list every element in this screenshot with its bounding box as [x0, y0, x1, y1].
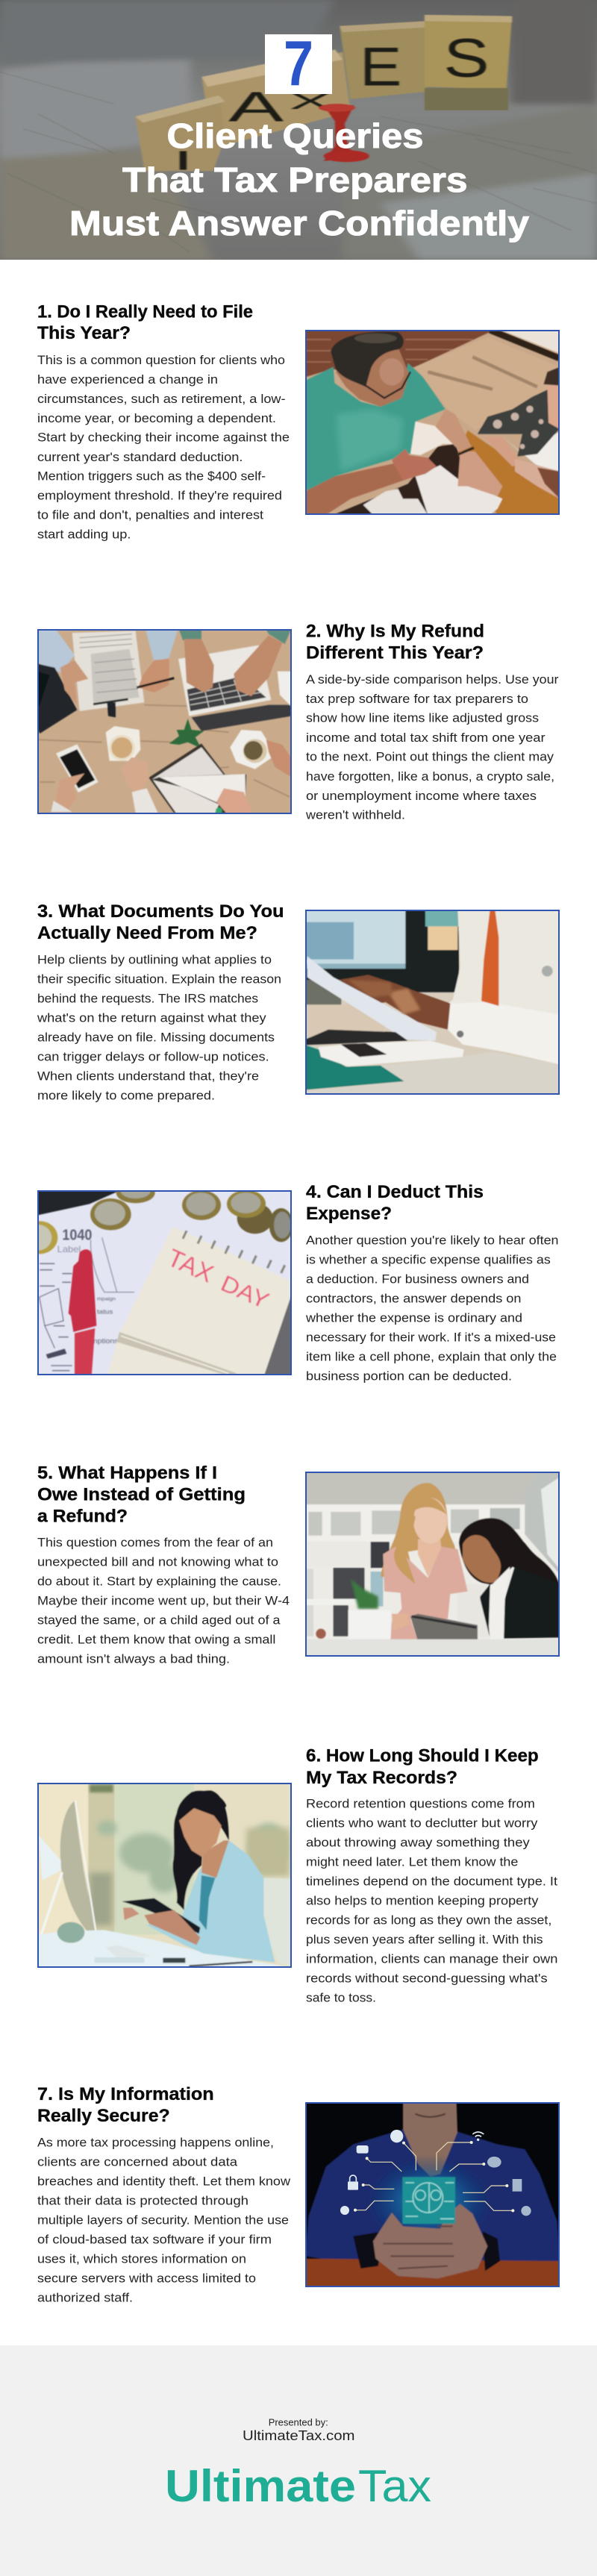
body text 7: secure servers with access limited to [37, 2271, 256, 2285]
body text 6: safe to toss. [306, 1991, 376, 2005]
heading 5: a Refund? [37, 1506, 128, 1526]
body text 3 [37, 953, 281, 1102]
header photo: scrabble tiles on map: E [360, 37, 401, 98]
body text 2: weren't withheld. [305, 808, 405, 822]
body text 4: business portion can be deducted. [306, 1369, 512, 1384]
heading 4: Expense? [306, 1204, 392, 1224]
body text 7 [37, 2136, 291, 2305]
body text 7: that their data is protected through [37, 2194, 249, 2208]
number 7 badge [265, 28, 332, 99]
body text 4: contractors, the answer depends on [306, 1292, 521, 1306]
photo 4: tax day notepad and coins: 1040 [62, 1228, 92, 1244]
body text 1: start adding up. [37, 527, 131, 542]
body text 3: more likely to come prepared. [37, 1088, 215, 1102]
body text 7: As more tax processing happens online, [37, 2136, 274, 2149]
body text 6: information, clients can manage their own [306, 1952, 557, 1966]
body text 5: stayed the same, or a child aged out of a [37, 1613, 281, 1627]
body text 4: whether the expense is ordinary and [305, 1310, 522, 1325]
header banner [0, 0, 597, 260]
title [69, 116, 529, 243]
body text 2: to the next. Point out things the client may [306, 750, 554, 764]
heading 3 [37, 901, 284, 943]
UltimateTax logo [165, 2461, 431, 2511]
panel: question 2 [37, 622, 559, 822]
heading 2 [306, 622, 484, 663]
body text 4: a deduction. For business owners and [306, 1272, 529, 1286]
panel: question 3 [37, 901, 560, 1102]
photo 4: tax day notepad and coins [22, 1182, 293, 1377]
footer [0, 2345, 597, 2576]
heading 6: 6. How Long Should I Keep [306, 1746, 539, 1766]
heading 3: 3. What Documents Do You [37, 901, 284, 922]
photo 2: team at wooden table [37, 629, 292, 814]
presented by credit: Presented by: [269, 2417, 328, 2428]
panel: question 1 [37, 301, 560, 542]
header photo: scrabble tiles on map: X [290, 90, 331, 114]
body text 6: also helps to mention keeping property [306, 1894, 539, 1907]
body text 1: Mention triggers such as the $400 self- [37, 469, 266, 484]
body text 5 [37, 1535, 290, 1666]
heading 4 [306, 1182, 484, 1224]
body text 7: multiple layers of security. Mention the use [37, 2213, 289, 2228]
heading 7: 7. Is My Information [37, 2084, 214, 2104]
panel: question 7 [37, 2084, 560, 2305]
heading 4: 4. Can I Deduct This [306, 1182, 484, 1202]
body text 2: have forgotten, like a bonus, a crypto sale, [306, 769, 554, 784]
body text 4: necessary for their work. If it's a mixed-use [306, 1330, 556, 1344]
heading 7: Really Secure? [37, 2106, 170, 2126]
photo 4: tax day notepad and coins: TAX [163, 1244, 217, 1289]
body text 7: authorized staff. [37, 2291, 133, 2305]
body text 1: current year's standard deduction. [37, 450, 243, 464]
body text 1: This is a common question for clients who [37, 353, 285, 367]
photo 4: tax day notepad and coins: mpaign [97, 1297, 116, 1302]
body text 4: item like a cell phone, explain that only the [306, 1350, 557, 1364]
body text 4: is whether a specific expense qualifies as [306, 1252, 551, 1267]
body text 6: timelines depend on the document type. It [306, 1875, 557, 1888]
header photo: scrabble tiles on map: S [443, 28, 490, 89]
UltimateTax logo: Tax [358, 2461, 431, 2511]
heading 5 [37, 1463, 246, 1526]
photo 6: woman with tablet at desk [37, 1783, 292, 1968]
presented by credit: UltimateTax.com [243, 2428, 355, 2443]
body text 6: records for as long as they own the asset, [306, 1913, 551, 1928]
body text 2: A side-by-side comparison helps. Use your [306, 672, 559, 687]
body text 6: Record retention questions come from [306, 1796, 535, 1810]
body text 4: Another question you're likely to hear often [306, 1234, 558, 1248]
body text 4 [305, 1234, 558, 1384]
UltimateTax logo: Ultimate [165, 2461, 356, 2511]
body text 3: what's on the return against what they [37, 1011, 266, 1025]
body text 7: clients are concerned about data [37, 2154, 238, 2169]
body text 5: unexpected bill and not knowing what to [37, 1555, 278, 1569]
body text 1: Start by checking their income against the [37, 430, 290, 445]
body text 6: about throwing away something they [306, 1836, 530, 1849]
body text 1: to file and don't, penalties and interest [37, 507, 263, 522]
body text 1 [37, 353, 290, 542]
title: That Tax Preparers [122, 160, 467, 199]
heading 6 [306, 1746, 539, 1788]
heading 2: 2. Why Is My Refund [306, 622, 484, 642]
body text 1: circumstances, such as retirement, a low- [37, 392, 285, 406]
body text 5: credit. Let them know that owing a small [37, 1633, 275, 1646]
heading 5: 5. What Happens If I [37, 1463, 217, 1484]
heading 2: Different This Year? [306, 643, 484, 663]
heading 3: Actually Need From Me? [37, 923, 257, 943]
body text 6: clients who want to declutter but worry [306, 1816, 538, 1830]
body text 2: tax prep software for tax preparers to [306, 692, 528, 706]
body text 2: show how line items like adjusted gross [306, 711, 539, 725]
heading 7 [37, 2084, 214, 2126]
photo 4: tax day notepad and coins: DAY [217, 1271, 272, 1314]
body text 6: plus seven years after selling it. With this [306, 1933, 543, 1947]
panel: question 6 [37, 1746, 557, 2005]
body text 3: already have on file. Missing documents [37, 1030, 275, 1045]
panel: question 5 [37, 1463, 560, 1666]
number 7 badge: 7 [284, 28, 313, 99]
body text 2: income and total tax shift from one year [306, 731, 546, 745]
header photo: scrabble tiles on map: A [228, 84, 284, 131]
photo 5: two women with tablet [305, 1472, 560, 1657]
body text 2 [305, 672, 559, 822]
panel: question 4 [22, 1182, 559, 1384]
heading 1: 1. Do I Really Need to File [37, 301, 253, 322]
body text 5: do about it. Start by explaining the cause. [37, 1575, 281, 1588]
photo 3: calculator and documents [305, 910, 560, 1095]
body text 3: can trigger delays or follow-up notices. [37, 1049, 269, 1063]
photo 4: tax day notepad and coins: nptions [93, 1337, 119, 1345]
body text 5: Maybe their income went up, but their W-4 [37, 1594, 290, 1607]
photo 7: hands holding glowing chip with security icons [305, 2102, 560, 2287]
body text 1: have experienced a change in [37, 372, 218, 387]
photo 4: tax day notepad and coins: tatus [97, 1308, 113, 1316]
body text 3: behind the requests. The IRS matches [37, 991, 258, 1005]
body text 7: of cloud-based tax software if your firm [37, 2233, 272, 2246]
body text 7: breaches and identity theft. Let them know [37, 2174, 291, 2188]
body text 3: their specific situation. Explain the reason [37, 972, 281, 987]
body text 6: might need later. Let them know the [306, 1855, 518, 1869]
heading 1: This Year? [37, 323, 131, 343]
title: Client Queries [167, 116, 424, 155]
body text 1: income year, or becoming a dependent. [37, 411, 276, 425]
body text 5: amount isn't always a bad thing. [37, 1652, 230, 1666]
body text 5: This question comes from the fear of an [37, 1535, 273, 1549]
photo 4: tax day notepad and coins: Label [57, 1244, 81, 1254]
body text 3: Help clients by outlining what applies to [37, 953, 272, 967]
body text 3: When clients understand that, they're [37, 1069, 259, 1084]
body text 7: uses it, which stores information on [37, 2251, 246, 2266]
body text 2: or unemployment income where taxes [306, 789, 537, 803]
heading 6: My Tax Records? [306, 1768, 457, 1788]
photo 1: man reviewing papers [305, 330, 560, 515]
title: Must Answer Confidently [69, 204, 529, 243]
header photo: scrabble tiles on map [0, 0, 597, 260]
heading 1 [37, 301, 253, 343]
heading 5: Owe Instead of Getting [37, 1485, 246, 1505]
body text 6: records without second-guessing what's [306, 1972, 548, 1986]
presented by credit [243, 2417, 355, 2443]
body text 1: employment threshold. If they're required [37, 488, 282, 503]
body text 6 [306, 1796, 557, 2005]
